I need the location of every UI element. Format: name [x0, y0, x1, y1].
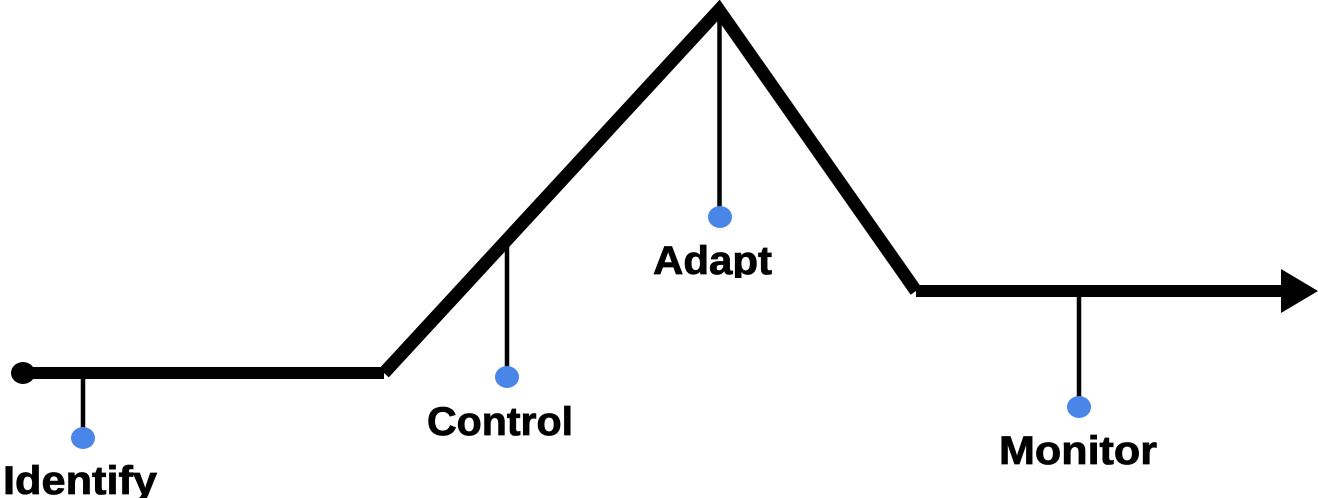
- step: Monitor: Monitor: [999, 429, 1157, 473]
- start point: [11, 362, 35, 384]
- main trajectory line: [22, 10, 1285, 373]
- step: Adapt: Adapt: [653, 239, 772, 283]
- step: Monitor: [999, 291, 1157, 473]
- step: Adapt: [653, 5, 772, 283]
- step: Identify: [3, 373, 158, 498]
- step: Control: Control: [427, 400, 573, 444]
- step: Control: [427, 243, 573, 444]
- arrow head: [1281, 269, 1318, 313]
